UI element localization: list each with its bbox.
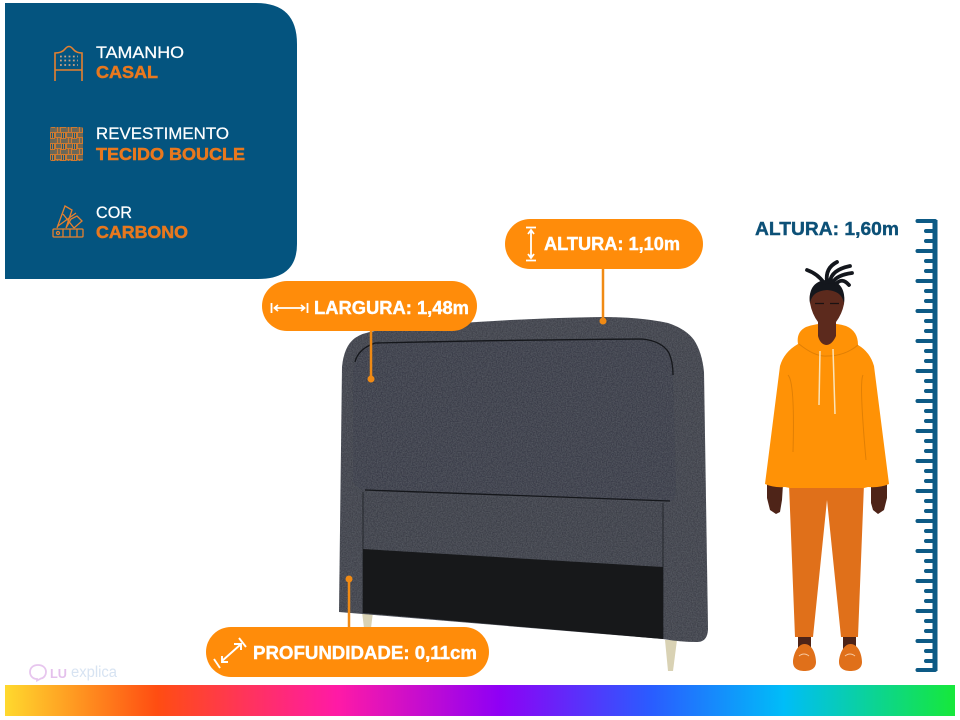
logo: Lu explica: LU [50, 666, 67, 681]
icon: vertical arrow [526, 228, 536, 260]
hands [767, 484, 887, 514]
label: revestimento: REVESTIMENTO [96, 124, 229, 143]
headboard frame [339, 317, 708, 642]
rainbow bar [5, 685, 955, 716]
icon: fabric weave [50, 127, 83, 161]
person height label: ALTURA: 1,60m [755, 218, 899, 239]
panel seam lines [355, 339, 673, 501]
trousers [789, 484, 864, 637]
ankles [798, 637, 856, 650]
headboard legs [362, 612, 677, 671]
icon: horizontal arrow [272, 303, 308, 313]
icon: headboard size [55, 46, 82, 81]
hoodie strings [819, 349, 835, 414]
callout: altura 1,10m: ALTURA: 1,10m [544, 234, 680, 254]
black base strip [363, 549, 663, 639]
value: casal: CASAL [96, 62, 158, 82]
eyes [815, 302, 839, 304]
panel: product specs [5, 3, 297, 279]
label: cor: COR [96, 203, 132, 222]
icon: colour swatches [53, 206, 83, 237]
value: carbono: CARBONO [96, 222, 188, 242]
label: tamanho: TAMANHO [96, 43, 184, 62]
icon: diagonal arrow [214, 638, 246, 668]
callout: altura 1,10m [505, 219, 703, 324]
logo: Lu explica [30, 664, 117, 681]
value: tecido boucle: TECIDO BOUCLE [96, 144, 245, 164]
shoes [793, 644, 862, 671]
lower fabric section [363, 492, 663, 567]
icon: speech bubble [30, 665, 46, 680]
headboard product image [339, 317, 708, 671]
height ruler [918, 220, 935, 671]
logo: Lu explica: explica [71, 664, 117, 681]
upholstered panel [353, 339, 676, 501]
callout: largura 1,48m: LARGURA: 1,48m [314, 298, 469, 318]
callout: profundidade 0,11cm [206, 576, 489, 677]
callout: profundidade 0,11cm: PROFUNDIDADE: 0,11cm [253, 643, 477, 663]
neck and face [810, 284, 844, 345]
figure: person for scale [765, 262, 889, 671]
callout: largura 1,48m [262, 281, 477, 382]
hair [810, 280, 844, 303]
hoodie [765, 323, 889, 488]
